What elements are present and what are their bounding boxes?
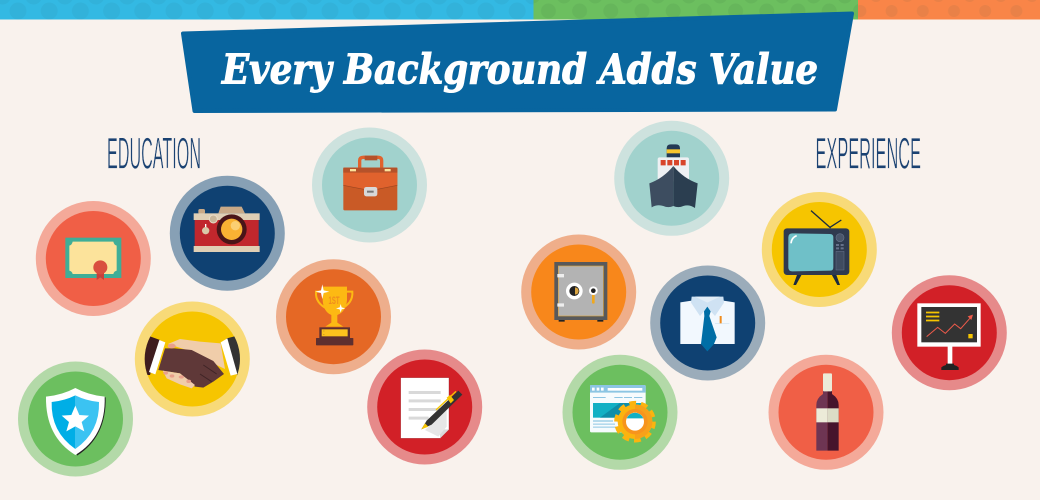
- title banner: [183, 14, 852, 111]
- badge: document and pen: [367, 350, 482, 464]
- icon: presentation chart: [917, 303, 981, 370]
- badge: television: [762, 192, 877, 307]
- icon: briefcase: [343, 156, 397, 210]
- icon: wine bottle: [816, 373, 839, 451]
- title: Every Background Adds Value: [221, 46, 818, 94]
- badge: safe: [521, 234, 636, 350]
- badge: camera: [170, 176, 285, 291]
- badge: presentation chart: [892, 275, 1007, 390]
- icon: document and pen: [401, 378, 462, 438]
- badge: shirt and tie: [650, 266, 765, 380]
- icon: trophy: 1ST: [328, 295, 340, 307]
- icon: shield: [46, 388, 106, 456]
- icon: ship: [649, 144, 698, 208]
- icon: handshake: [142, 336, 243, 388]
- infographic canvas: EDUCATION: [107, 129, 201, 178]
- icon: camera: [194, 207, 260, 252]
- icon: shirt and tie: [680, 297, 735, 351]
- icon: diploma: [65, 238, 121, 280]
- badge: web settings: [562, 355, 678, 470]
- badge: handshake: [135, 302, 250, 416]
- badge: trophy: [276, 259, 391, 374]
- icon: television: [784, 211, 849, 285]
- icon: safe: [554, 262, 607, 322]
- icon: web settings: [590, 385, 653, 440]
- top colour band: [0, 0, 1040, 20]
- badge: diploma: [36, 201, 151, 316]
- badge: ship: [614, 121, 729, 236]
- badge: wine bottle: [768, 355, 884, 470]
- badge: shield: [18, 362, 133, 476]
- badge: briefcase: [312, 128, 427, 242]
